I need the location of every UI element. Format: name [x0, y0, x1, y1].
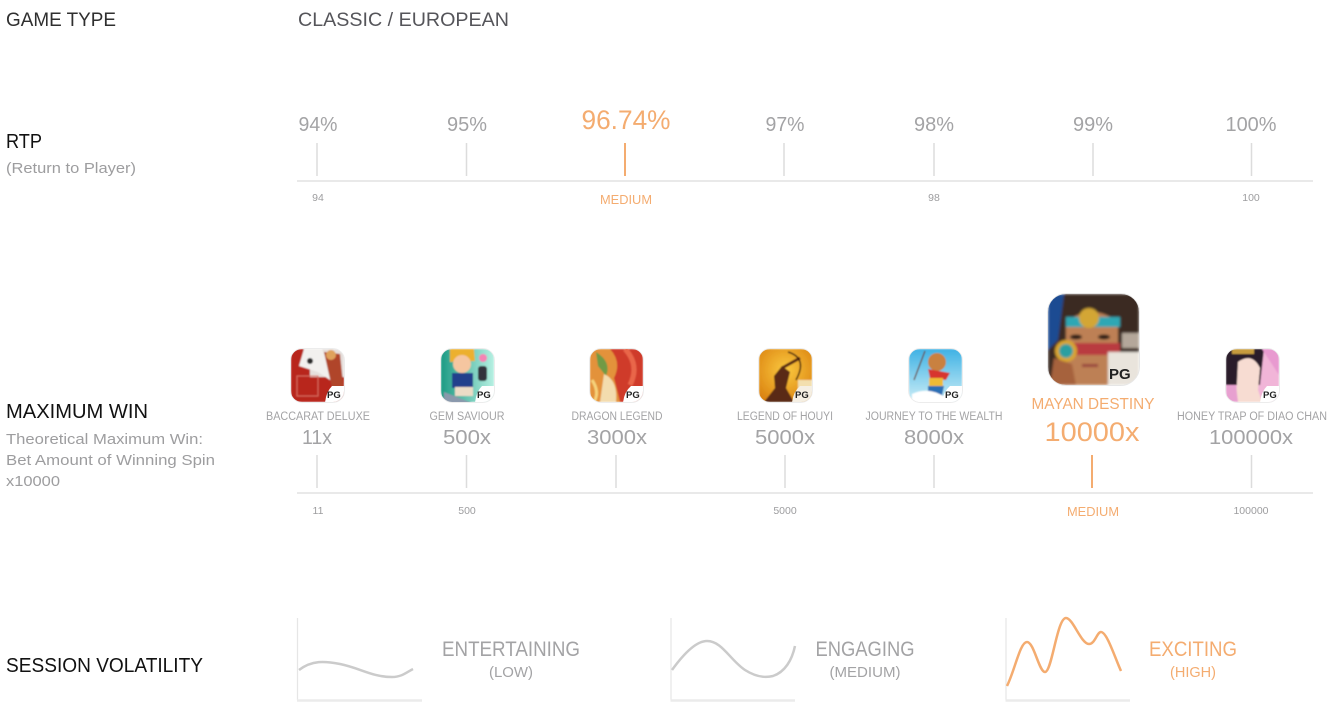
chart: medium volatility curve [670, 618, 795, 700]
icon: legend of houyi [758, 348, 812, 403]
label: exciting high: (HIGH) [1170, 664, 1216, 681]
label: engaging medium [816, 638, 914, 681]
icon: mayan destiny [1048, 294, 1140, 386]
section label: RTP [6, 131, 136, 177]
chart: maximum win scale: 8000x [904, 427, 964, 449]
icon: legend of houyi: PG [795, 390, 809, 401]
chart: RTP scale: 98 [928, 192, 940, 204]
chart: maximum win scale: LEGEND OF HOUYI [737, 411, 833, 423]
chart: maximum win scale: 100000x [1209, 427, 1293, 449]
icon: journey to the wealth [908, 348, 962, 403]
chart: maximum win scale: 10000x [1044, 417, 1140, 447]
icon: baccarat deluxe [290, 348, 344, 403]
section label: maximum win [6, 401, 215, 490]
section label: maximum win: Bet Amount of Winning Spin [6, 452, 215, 469]
chart: RTP scale: 95% [447, 114, 487, 136]
chart: RTP scale: 98% [914, 114, 954, 136]
label: entertaining low: (LOW) [489, 664, 533, 681]
chart: maximum win scale: 500 [458, 505, 476, 517]
chart: RTP scale: 97% [766, 114, 805, 136]
chart: maximum win scale: 500x [443, 427, 491, 449]
chart: maximum win scale: JOURNEY TO THE WEALTH [866, 411, 1002, 423]
section label: maximum win: Theoretical Maximum Win: [6, 431, 203, 448]
chart: RTP scale: 100 [1242, 192, 1260, 204]
chart: maximum win scale: MEDIUM [1067, 504, 1119, 519]
icon: baccarat deluxe: PG [327, 390, 341, 401]
chart: RTP scale: 99% [1073, 114, 1113, 136]
icon: dragon legend: PG [626, 390, 640, 401]
icon: mayan destiny: PG [1109, 366, 1131, 383]
chart: maximum win scale: 5000 [773, 505, 797, 517]
label: exciting high: EXCITING [1149, 638, 1237, 661]
icon: gem saviour: PG [477, 390, 491, 401]
section label: RTP: RTP [6, 131, 42, 153]
label: engaging medium: (MEDIUM) [830, 664, 900, 681]
section label: maximum win: x10000 [6, 473, 60, 490]
label: entertaining low [442, 638, 580, 681]
chart: RTP scale [297, 105, 1313, 207]
icon: honey trap of diao chan [1226, 348, 1280, 403]
icon: dragon legend [590, 348, 644, 403]
icon: gem saviour [440, 348, 494, 403]
chart: low volatility curve [297, 618, 422, 700]
value: classic / european: CLASSIC / EUROPEAN [298, 9, 509, 31]
chart: RTP scale: MEDIUM [600, 192, 652, 207]
chart: maximum win scale: 11x [302, 427, 332, 449]
icon: journey to the wealth: PG [945, 390, 959, 401]
heading: game type: GAME TYPE [6, 9, 116, 31]
section label: maximum win: MAXIMUM WIN [6, 401, 148, 423]
chart: RTP scale: 94 [312, 192, 324, 204]
chart: high volatility curve [1006, 618, 1130, 700]
chart: maximum win scale: DRAGON LEGEND [572, 411, 662, 423]
chart: maximum win scale: MAYAN DESTINY [1032, 396, 1154, 413]
chart: maximum win scale: 11 [313, 505, 324, 517]
label: entertaining low: ENTERTAINING [442, 638, 580, 661]
chart: maximum win scale [266, 396, 1327, 519]
section label: RTP: (Return to Player) [6, 160, 136, 177]
chart: maximum win scale: BACCARAT DELUXE [266, 411, 370, 423]
label: engaging medium: ENGAGING [816, 638, 914, 661]
chart: RTP scale: 96.74% [582, 105, 670, 135]
chart: maximum win scale: 3000x [587, 427, 647, 449]
label: exciting high [1149, 638, 1237, 681]
section label: session volatility: SESSION VOLATILITY [6, 655, 203, 677]
chart: maximum win scale: 5000x [755, 427, 815, 449]
chart: RTP scale: 100% [1226, 114, 1277, 136]
chart: RTP scale: 94% [298, 114, 338, 136]
chart: maximum win scale: GEM SAVIOUR [430, 411, 504, 423]
chart: maximum win scale: 100000 [1233, 505, 1269, 517]
icon: honey trap of diao chan: PG [1263, 390, 1277, 401]
